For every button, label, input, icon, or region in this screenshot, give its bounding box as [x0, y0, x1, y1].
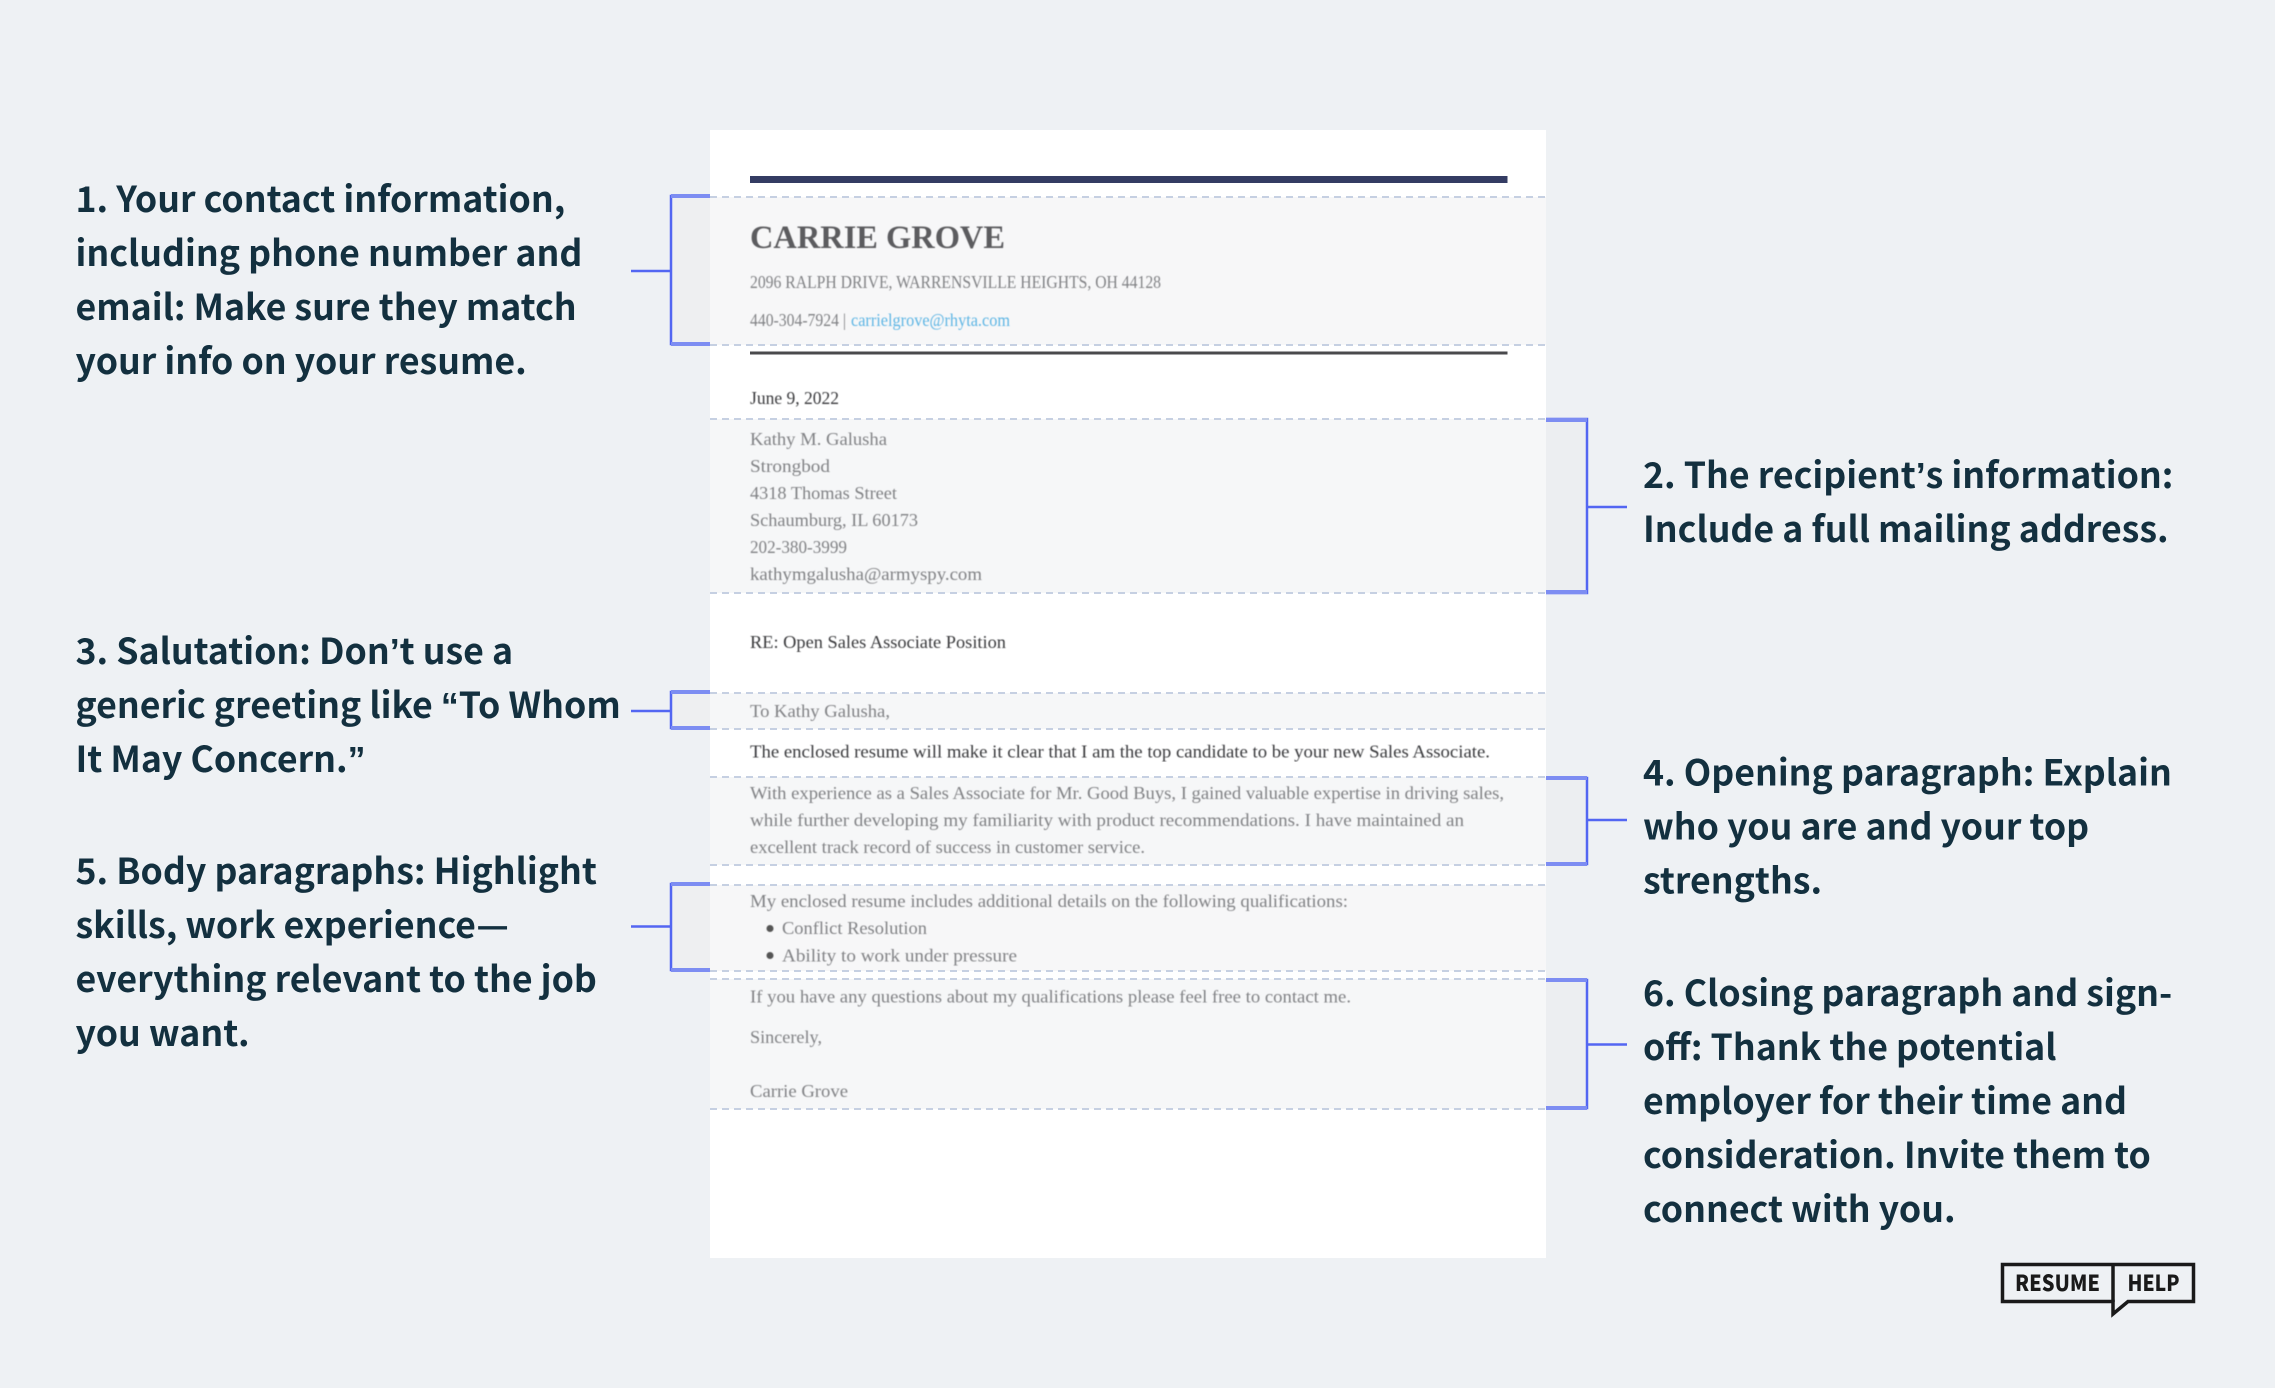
section highlight: contact information — [671, 197, 1546, 345]
callout 1: contact information: including phone number and — [76, 226, 582, 277]
callout 2: recipient information: Include a full mailing address. — [1643, 502, 2169, 553]
bracket 6: closing paragraph — [1546, 980, 1627, 1108]
opening paragraph text: excellent track record of success in customer service. — [750, 837, 1145, 857]
bracket 4: opening paragraph — [1546, 778, 1627, 864]
opening sentence: The enclosed resume will make it clear that I am the top candidate to be your new Sales Associate. — [750, 742, 1490, 762]
callout 6: closing paragraph: 6. Closing paragraph and sign- — [1643, 966, 2172, 1017]
bracket 1: contact information — [631, 196, 710, 344]
closing text and sign-off — [750, 986, 1351, 1101]
closing text and sign-off: If you have any questions about my qualifications please feel free to contact me. — [750, 986, 1351, 1006]
callout 1: contact information: your info on your resume. — [76, 334, 527, 385]
callout 1: contact information: 1. Your contact information, — [76, 172, 565, 223]
closing text and sign-off: Carrie Grove — [750, 1081, 848, 1101]
recipient details: 4318 Thomas Street — [750, 483, 897, 503]
logo: Resume Help: RESUME — [2015, 1266, 2100, 1298]
callout 6: closing paragraph: connect with you. — [1643, 1182, 1956, 1233]
body paragraph text: My enclosed resume includes additional details on the following qualifications: — [750, 891, 1348, 911]
callout 6: closing paragraph: consideration. Invite them to — [1643, 1128, 2151, 1179]
date: June 9, 2022 — [750, 388, 839, 408]
recipient details: 202-380-3999 — [750, 537, 847, 557]
recipient details: kathymgalusha@armyspy.com — [750, 564, 982, 584]
callout 5: body paragraphs: 5. Body paragraphs: Highlight — [76, 844, 597, 895]
recipient details: Strongbod — [750, 456, 830, 476]
callout 4: opening paragraph: who you are and your top — [1643, 800, 2089, 850]
callout 5: body paragraphs — [76, 844, 597, 1057]
applicant name: CARRIE GROVE — [750, 220, 1005, 256]
section highlight: salutation — [671, 693, 1546, 729]
subject line: RE: Open Sales Associate Position — [750, 632, 1006, 652]
top navy rule — [750, 176, 1508, 183]
body paragraph text — [750, 891, 1348, 966]
section highlight: closing paragraph — [710, 979, 1587, 1109]
opening paragraph text: while further developing my familiarity with product recommendations. I have maintained an — [750, 810, 1464, 830]
applicant email: carrielgrove@rhyta.com — [851, 310, 1010, 330]
bracket 3: salutation — [631, 692, 710, 728]
opening paragraph text: With experience as a Sales Associate for Mr. Good Buys, I gained valuable expertise in driving sales, — [750, 783, 1504, 803]
recipient details: Kathy M. Galusha — [750, 429, 887, 449]
applicant phone: 440-304-7924 | — [750, 310, 846, 330]
callout 4: opening paragraph: 4. Opening paragraph: Explain — [1643, 746, 2172, 796]
callout 3: salutation: generic greeting like “To Whom — [76, 678, 621, 729]
callout 3: salutation: It May Concern.” — [76, 732, 366, 783]
callout 6: closing paragraph — [1643, 966, 2172, 1233]
section highlight: opening paragraph — [710, 777, 1587, 865]
header divider — [750, 352, 1508, 354]
opening paragraph text — [750, 783, 1504, 857]
body paragraph text: Ability to work under pressure — [782, 946, 1017, 966]
body paragraph text: Conflict Resolution — [782, 918, 927, 938]
callout 6: closing paragraph: employer for their time and — [1643, 1074, 2127, 1125]
callout 4: opening paragraph: strengths. — [1643, 854, 1822, 904]
callout 5: body paragraphs: you want. — [76, 1006, 250, 1057]
callout 2: recipient information: 2. The recipient’s information: — [1643, 448, 2173, 499]
callout 1: contact information: email: Make sure they match — [76, 280, 577, 331]
bracket 2: recipient information — [1546, 419, 1627, 593]
callout 2: recipient information — [1643, 448, 2173, 553]
applicant address: 2096 RALPH DRIVE, WARRENSVILLE HEIGHTS, OH 44128 — [750, 272, 1161, 292]
panel: cover letter page — [671, 130, 1587, 1258]
bracket 5: body paragraphs — [631, 884, 710, 970]
logo: Resume Help — [2002, 1264, 2194, 1314]
section highlight: recipient information — [710, 419, 1587, 593]
salutation text: To Kathy Galusha, — [750, 701, 890, 721]
logo: Resume Help: HELP — [2128, 1266, 2180, 1298]
recipient details — [750, 429, 982, 584]
callout 6: closing paragraph: off: Thank the potential — [1643, 1020, 2057, 1071]
callout 5: body paragraphs: everything relevant to the job — [76, 952, 597, 1003]
callout 5: body paragraphs: skills, work experience— — [76, 898, 509, 949]
section highlight: body paragraphs — [671, 885, 1546, 971]
callout 3: salutation — [76, 624, 621, 783]
closing text and sign-off: Sincerely, — [750, 1027, 822, 1047]
callout 3: salutation: 3. Salutation: Don’t use a — [76, 624, 513, 675]
recipient details: Schaumburg, IL 60173 — [750, 510, 918, 530]
callout 4: opening paragraph — [1643, 746, 2172, 904]
callout 1: contact information — [76, 172, 582, 385]
